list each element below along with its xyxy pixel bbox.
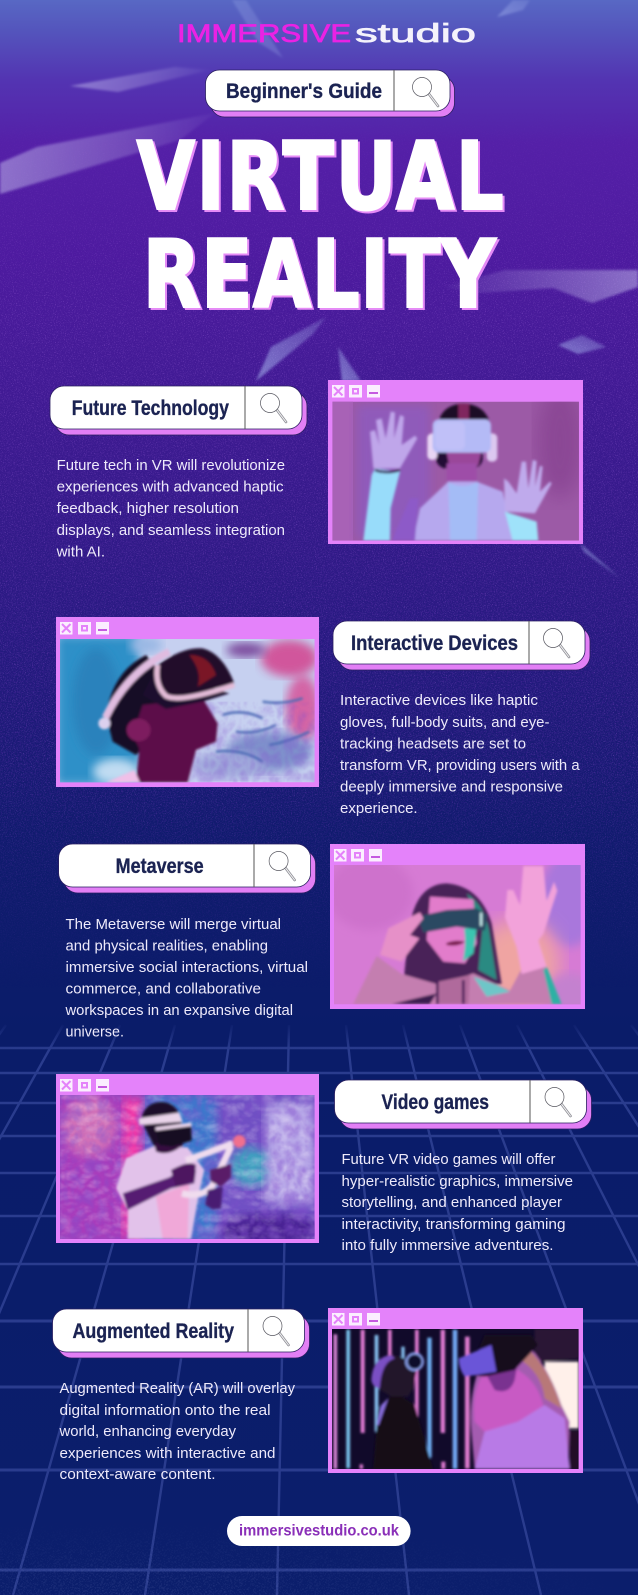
search pill: Future Technology xyxy=(50,386,307,435)
search pill: Video games: Video games xyxy=(382,1091,489,1114)
body text: Future Technology: with AI. xyxy=(56,544,105,560)
body text: Augmented Reality xyxy=(59,1380,295,1483)
body text: Interactive Devices: Interactive devices like haptic xyxy=(340,692,538,709)
logo word: immersive: IMMERSIVE xyxy=(177,20,351,48)
body text: Future Technology: feedback, higher resolution xyxy=(57,500,239,517)
logo xyxy=(177,18,476,48)
body text: Interactive Devices: tracking headsets are set to xyxy=(340,736,526,752)
window buttons xyxy=(334,849,382,862)
photo: woman in white headset xyxy=(332,402,579,541)
title line: REALITY: REALITY xyxy=(145,222,498,331)
window buttons xyxy=(332,385,380,398)
search pill: Beginner's Guide: Beginner's Guide xyxy=(226,80,382,103)
window buttons xyxy=(60,622,109,634)
search pill: Interactive Devices xyxy=(333,621,590,670)
panel: Future Technology xyxy=(50,380,583,560)
website text: immersivestudio.co.uk xyxy=(239,1522,399,1540)
body text: Augmented Reality: context-aware content. xyxy=(60,1466,215,1483)
title line: REALITY: REALITY xyxy=(143,220,496,329)
body text: Future Technology: Future tech in VR will revolutionize xyxy=(57,457,285,474)
body text: Video games: into fully immersive adventures. xyxy=(342,1237,554,1254)
background perspective grid xyxy=(0,1025,638,1595)
bottom speckle xyxy=(0,1532,548,1595)
photo: man in black headset xyxy=(56,635,319,785)
panel: Augmented Reality xyxy=(52,1308,583,1483)
body text: Augmented Reality: digital information onto the real xyxy=(60,1402,270,1419)
body text: Interactive Devices xyxy=(340,692,580,817)
body text: Interactive Devices: transform VR, providing users with a xyxy=(340,757,580,774)
body text: Metaverse: workspaces in an expansive digital xyxy=(65,1002,293,1019)
body text: Augmented Reality: world, enhancing everyday xyxy=(59,1423,236,1440)
window frame with photo: woman in white headset xyxy=(328,380,583,544)
body text: Augmented Reality: Augmented Reality (AR) will overlay xyxy=(60,1380,295,1397)
window frame with photo: man with VR controller xyxy=(56,1074,319,1247)
panel: Video games xyxy=(56,1074,592,1254)
logo word: studio: studio xyxy=(355,18,476,48)
body text: Future Technology xyxy=(56,457,285,560)
body text: Video games: storytelling, and enhanced player xyxy=(342,1194,562,1211)
body text: Future Technology: experiences with advanced haptic xyxy=(57,479,284,496)
website link pill xyxy=(227,1516,411,1546)
title xyxy=(137,122,505,331)
search pill: Future Technology: Future Technology xyxy=(72,397,229,420)
photo: two people in neon room xyxy=(332,1329,579,1469)
body text: Video games xyxy=(342,1151,573,1254)
title line: VIRTUAL: VIRTUAL xyxy=(137,122,503,231)
body text: Metaverse: The Metaverse will merge virtual xyxy=(66,916,281,933)
window frame with photo: two people in neon room xyxy=(328,1308,583,1473)
window buttons xyxy=(332,1313,380,1326)
panel: Interactive Devices xyxy=(56,617,590,817)
background shards xyxy=(0,0,638,578)
body text: Interactive Devices: experience. xyxy=(340,800,418,817)
search pill: Interactive Devices: Interactive Devices xyxy=(351,632,518,655)
background grain xyxy=(0,168,638,956)
body text: Metaverse: commerce, and collaborative xyxy=(66,981,261,998)
search pill: Metaverse: Metaverse xyxy=(116,855,204,878)
search pill: Video games xyxy=(334,1080,592,1129)
body text: Metaverse: and physical realities, enabling xyxy=(66,938,268,955)
panel: Metaverse xyxy=(59,844,600,1041)
search pill: Beginner's Guide xyxy=(206,70,454,117)
body text: Video games: Future VR video games will offer xyxy=(342,1151,556,1168)
body text: Future Technology: displays, and seamless integration xyxy=(57,522,285,539)
body text: Metaverse: immersive social interactions, virtual xyxy=(66,959,308,976)
window buttons xyxy=(60,1079,109,1092)
window frame with photo: woman with visor xyxy=(327,844,600,1013)
title line: VIRTUAL: VIRTUAL xyxy=(139,124,505,233)
body text: Interactive Devices: deeply immersive and responsive xyxy=(340,778,563,796)
photo: man with VR controller xyxy=(60,1095,315,1239)
window frame with photo: man in black headset xyxy=(56,617,319,787)
body text: Video games: hyper-realistic graphics, immersive xyxy=(342,1173,573,1190)
body text: Augmented Reality: experiences with interactive and xyxy=(60,1445,276,1462)
body text: Video games: interactivity, transforming gaming xyxy=(342,1216,566,1233)
body text: Interactive Devices: gloves, full-body suits, and eye- xyxy=(340,714,550,731)
search pill: Augmented Reality xyxy=(52,1309,310,1358)
search pill: Augmented Reality: Augmented Reality xyxy=(72,1320,234,1343)
search pill: Metaverse xyxy=(59,844,316,893)
body text: Metaverse xyxy=(65,916,308,1041)
photo: woman with visor xyxy=(334,865,581,1004)
body text: Metaverse: universe. xyxy=(66,1024,124,1041)
